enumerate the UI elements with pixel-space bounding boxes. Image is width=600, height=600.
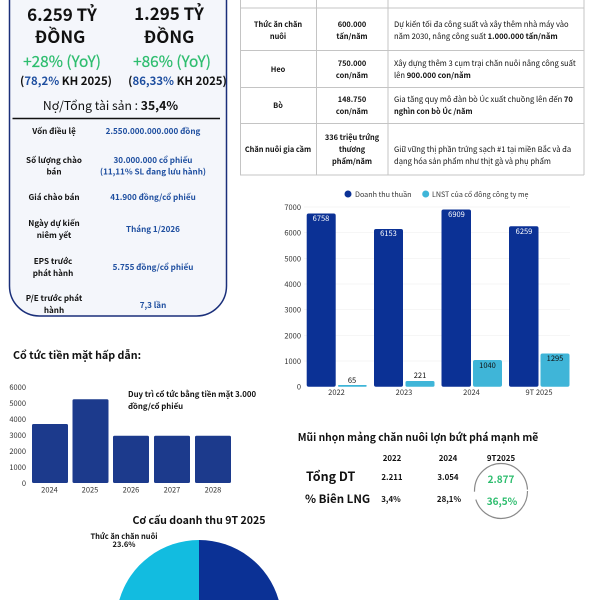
x axis: 2024 xyxy=(463,387,480,398)
y axis xyxy=(9,382,26,489)
row: animal feed: 600.000 xyxy=(338,19,367,30)
bar values: 221 xyxy=(414,370,426,381)
table: pig segment metrics: Tổng DT xyxy=(306,466,355,485)
dividend note: đồng/cổ phiếu xyxy=(128,401,183,412)
x axis: 2027 xyxy=(164,484,180,496)
bar values: 6909 xyxy=(448,209,465,220)
row: charter capital: Vốn điều lệ xyxy=(31,126,76,137)
row: charter capital: 2.550.000.000.000 đồng xyxy=(106,126,201,137)
row: EPS: phát hành xyxy=(33,268,73,279)
y axis xyxy=(284,202,301,393)
row: animal feed: năm 2030, nâng công suất 1.000.000 tấn/năm xyxy=(394,31,558,42)
row: cattle: Bò xyxy=(273,100,283,111)
row: P/E xyxy=(26,293,166,316)
row: poultry: 336 triệu trứng xyxy=(325,132,380,143)
row: listing date: Ngày dự kiến xyxy=(28,218,80,229)
chart: revenue and net profit xyxy=(284,190,570,398)
row: P/E: P/E trước phát xyxy=(26,293,83,304)
row: pigs: con/năm xyxy=(336,70,368,81)
row: poultry: dạng hóa sản phẩm như thịt gà và phụ phẩm xyxy=(394,156,551,167)
row: listing date: Tháng 1/2026 xyxy=(126,224,180,235)
row: offering price xyxy=(28,192,196,203)
x axis: 2023 xyxy=(396,387,412,398)
table: pig segment metrics: 2024 xyxy=(439,453,458,464)
row: cattle: nghìn con bò Úc /năm xyxy=(394,106,473,117)
row: EPS: EPS trước xyxy=(34,256,73,267)
debt to assets ratio: Nợ/Tổng tài sản : 35,4% xyxy=(43,96,178,114)
row: pigs: lên 900.000 con/năm xyxy=(394,70,471,81)
table: pig segment metrics: 2.211 xyxy=(381,472,403,483)
bar values: 1295 xyxy=(547,353,563,364)
y axis: 4000 xyxy=(9,414,26,425)
legend xyxy=(344,190,529,200)
row: poultry: Chăn nuôi gia cầm xyxy=(245,144,311,155)
profit bars xyxy=(338,354,570,387)
row: animal feed: Thức ăn chăn xyxy=(254,19,302,30)
profit growth: +86% (YoY) xyxy=(133,50,211,72)
pie label: animal feed xyxy=(90,531,158,550)
row: listing date xyxy=(28,218,180,241)
row: animal feed: nuôi xyxy=(270,31,286,42)
highlighted values: 2.877 xyxy=(488,471,515,486)
pie label: animal feed: Thức ăn chăn nuôi xyxy=(90,531,158,542)
row: listing date: niêm yết xyxy=(37,230,72,241)
table: pig segment metrics: % Biên LNG xyxy=(305,491,370,507)
row: P/E: hành xyxy=(44,305,64,316)
row: cattle: Gia tăng quy mô đàn bò Úc xuất chuồng lên đến 70 xyxy=(394,94,573,105)
table: pig segment metrics: 9T2025 xyxy=(487,453,515,464)
row: EPS: 5.755 đồng/cổ phiếu xyxy=(113,262,193,273)
row: charter capital xyxy=(31,126,201,137)
row: poultry: thương xyxy=(339,144,366,155)
legend: Doanh thu thuần xyxy=(355,190,412,200)
bar values: 6758 xyxy=(313,213,329,224)
row: poultry xyxy=(245,132,571,167)
y axis: 5000 xyxy=(284,253,301,264)
row: pigs: Heo xyxy=(271,64,286,75)
y axis: 3000 xyxy=(9,430,26,441)
row: cattle: con/năm xyxy=(336,106,368,117)
row: cattle xyxy=(273,94,573,117)
table: pig segment metrics: 3.054 xyxy=(437,472,459,483)
row: offering quantity: 30.000.000 cổ phiếu xyxy=(114,155,192,166)
y axis: 3000 xyxy=(284,305,301,316)
legend: LNST của cổ đông công ty mẹ xyxy=(432,190,529,200)
y axis: 0 xyxy=(297,382,301,393)
row: offering price: 41.900 đồng/cổ phiếu xyxy=(110,192,196,203)
revenue figure: ĐỒNG xyxy=(35,23,85,48)
revenue figure xyxy=(27,1,97,48)
profit figure: ĐỒNG xyxy=(144,23,194,48)
profit figure xyxy=(134,0,204,48)
row: poultry: phẩm/năm xyxy=(332,156,372,167)
bar values: 6153 xyxy=(380,228,397,239)
highlighted values xyxy=(487,471,518,508)
bar values xyxy=(313,209,563,386)
profit figure: 1.295 TỶ xyxy=(134,0,204,25)
row: animal feed: Dự kiến tối đa công suất và xây thêm nhà máy vào xyxy=(394,19,569,30)
heading: pig segment: Mũi nhọn mảng chăn nuôi lợn bứt phá mạnh mẽ xyxy=(298,429,538,444)
dividend note: Duy trì cổ tức bằng tiền mặt 3.000 xyxy=(128,388,257,400)
y axis: 0 xyxy=(22,478,26,489)
table: pig segment metrics xyxy=(305,453,528,518)
heading: cash dividend: Cổ tức tiền mặt hấp dẫn: xyxy=(13,348,141,363)
chart: revenue structure pie xyxy=(119,540,279,600)
row: offering quantity: Số lượng chào xyxy=(26,155,82,166)
highlight circle xyxy=(474,464,528,518)
row: offering quantity: (11,11% SL đang lưu hành) xyxy=(100,166,206,178)
x axis xyxy=(328,387,552,398)
x axis: 2024 xyxy=(41,484,58,496)
y axis: 5000 xyxy=(9,398,26,409)
x axis: 2028 xyxy=(205,484,221,496)
row: pigs: 750.000 xyxy=(338,58,367,69)
y axis: 1000 xyxy=(9,462,26,473)
y axis: 6000 xyxy=(284,228,301,239)
x axis: 9T 2025 xyxy=(526,387,552,398)
bar values: 6259 xyxy=(516,226,532,237)
dividend note xyxy=(128,388,257,412)
heading: revenue structure: Cơ cấu doanh thu 9T 2025 xyxy=(132,513,266,528)
y axis: 7000 xyxy=(284,202,301,213)
row: cattle: 148.750 xyxy=(338,94,367,105)
row: pigs xyxy=(271,58,576,81)
row: offering price: Giá chào bán xyxy=(28,192,80,203)
row: pigs: Xây dựng thêm 3 cụm trại chăn nuôi nâng công suất xyxy=(394,58,576,69)
row: offering quantity xyxy=(26,155,206,178)
bar values: 65 xyxy=(348,375,356,386)
x axis: 2025 xyxy=(82,484,98,496)
y axis: 2000 xyxy=(284,330,301,341)
x axis: 2022 xyxy=(328,387,345,398)
row: poultry: Giữ vững thị phần trứng sạch #1 tại miền Bắc và đa xyxy=(394,144,571,155)
revenue figure: 6.259 TỶ xyxy=(27,1,97,26)
table: pig segment metrics: 2022 xyxy=(383,453,402,464)
y axis: 4000 xyxy=(284,279,301,290)
table: pig segment metrics: 28,1% xyxy=(437,494,461,505)
x axis xyxy=(41,484,221,496)
revenue growth: +28% (YoY) xyxy=(23,50,101,72)
dividend bars xyxy=(32,399,231,483)
table: pig segment metrics: 3,4% xyxy=(381,494,401,505)
panel: offering summary xyxy=(10,0,227,316)
profit plan completion: (86,33% KH 2025) xyxy=(128,73,227,89)
y axis: 6000 xyxy=(9,382,26,393)
row: EPS xyxy=(33,256,193,279)
row: P/E: 7,3 lần xyxy=(140,300,166,311)
table: capacity plans xyxy=(240,0,584,175)
y axis: 2000 xyxy=(9,446,26,457)
row: animal feed xyxy=(254,19,569,42)
revenue bars xyxy=(307,210,538,387)
x axis: 2026 xyxy=(123,484,139,496)
row: animal feed: tấn/năm xyxy=(336,31,368,42)
bar values: 1040 xyxy=(479,360,496,371)
chart: cash dividend xyxy=(9,382,231,496)
row: offering quantity: bán xyxy=(46,166,62,178)
pie label: animal feed: 23.6% xyxy=(113,539,135,550)
y axis: 1000 xyxy=(284,356,301,367)
highlighted values: 36,5% xyxy=(487,493,518,508)
revenue plan completion: (78,2% KH 2025) xyxy=(20,73,112,89)
